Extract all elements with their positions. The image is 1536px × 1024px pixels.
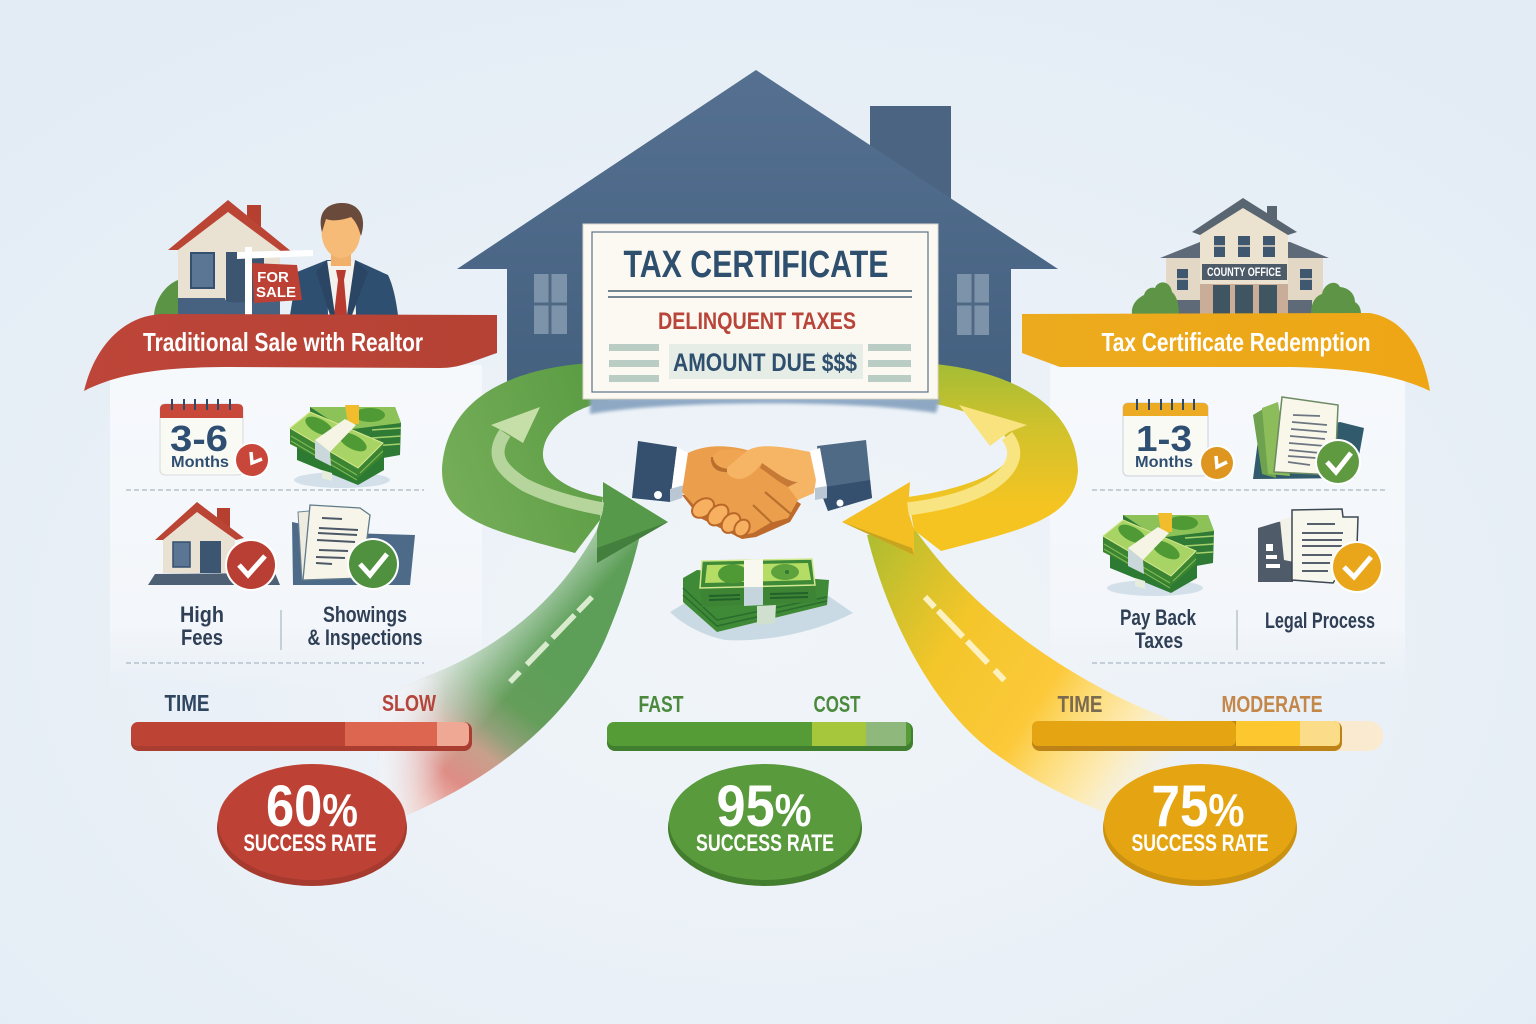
delinquent taxes label: DELINQUENT TAXES (658, 308, 856, 335)
progress bar: redemption: TIME (1058, 691, 1102, 717)
banner: traditional sale heading (84, 314, 497, 391)
banner: redemption heading (1022, 313, 1430, 391)
icon: documents with green check (292, 505, 415, 590)
icon: center money stack (670, 559, 853, 640)
success badge: 75%: SUCCESS RATE (1132, 830, 1268, 857)
icon: bush right (1311, 283, 1361, 314)
panel: redemption backdrop (1050, 365, 1405, 690)
icon: calendar 1-3 months: Months (1135, 454, 1193, 471)
icon: money stack traditional (290, 405, 401, 488)
success badge: 95%: SUCCESS RATE (696, 830, 834, 857)
success badge: 60%: SUCCESS RATE (244, 830, 376, 857)
certificate rules (608, 291, 912, 297)
label: high fees line two: Fees (181, 625, 223, 650)
banner: traditional sale icons (154, 200, 398, 315)
icon: for sale sign: SALE (256, 284, 296, 301)
progress bar: center: COST (814, 691, 860, 717)
label: taxes: Taxes (1135, 628, 1183, 653)
fingers (688, 494, 753, 539)
road dashes: yellow (925, 597, 1006, 682)
icon: for sale sign: FOR (257, 269, 289, 286)
icon: papers with money and check (1253, 397, 1364, 485)
label: showings: Showings (323, 602, 407, 627)
icon: realtor (290, 203, 398, 315)
success badge: 75% (1103, 764, 1297, 886)
label: high fees: High (180, 602, 224, 627)
banner: traditional sale heading: Traditional Sale with Realtor (143, 327, 423, 357)
certificate title: TAX CERTIFICATE (624, 244, 888, 286)
divider (126, 490, 1387, 663)
yellow road arrow (867, 528, 1190, 812)
green road arrow (378, 530, 640, 815)
icon: bush (154, 280, 178, 315)
amount band lines (609, 348, 911, 378)
icon: calendar 1-3 months: 1-3 (1136, 418, 1192, 459)
progress bar: center: FAST (638, 691, 684, 717)
icon: for sale sign (237, 247, 313, 315)
amount due: AMOUNT DUE $$$ (673, 349, 857, 377)
panel: traditional sale backdrop (110, 365, 482, 690)
icon: money stack redemption (1103, 513, 1214, 596)
icon: calendar 3-6 months (160, 399, 270, 478)
yellow loop arrow (842, 362, 1078, 555)
green loop arrow (442, 362, 668, 563)
icon: calendar 3-6 months: 3-6 (170, 418, 228, 459)
success badge: 95% (668, 764, 862, 886)
progress bar: redemption (1032, 691, 1383, 751)
progress bar: center (607, 691, 913, 751)
icon: county office: COUNTY OFFICE (1207, 265, 1281, 279)
icon: house with check (148, 502, 280, 591)
progress bar: redemption: MODERATE (1222, 691, 1322, 717)
icon: handshake (632, 440, 872, 539)
central house (457, 70, 1058, 400)
amount band (669, 344, 863, 379)
divider (281, 610, 1237, 650)
icon: bush left (1132, 282, 1179, 314)
banner: redemption heading: Tax Certificate Redemption (1102, 327, 1370, 357)
success badge: 75%: 75% (1152, 774, 1244, 839)
progress bar: traditional (131, 690, 472, 751)
label: legal process: Legal Process (1265, 608, 1375, 633)
progress bar: traditional: TIME (164, 690, 210, 716)
progress bar: traditional: SLOW (382, 690, 436, 716)
icon: documents with yellow check (1258, 509, 1383, 593)
tax certificate document (583, 224, 938, 399)
icon: calendar 3-6 months: Months (171, 454, 229, 471)
success badge: 60% (217, 764, 407, 886)
success badge: 95%: 95% (716, 774, 812, 839)
icon: calendar 1-3 months (1123, 399, 1235, 481)
success badge: 60%: 60% (266, 774, 358, 839)
road dashes: green (510, 597, 592, 682)
label: pay back: Pay Back (1120, 605, 1197, 630)
label: inspections: & Inspections (308, 625, 422, 650)
certificate shadow (590, 398, 940, 414)
icon: small house (168, 200, 292, 315)
icon: county office (1132, 198, 1361, 314)
